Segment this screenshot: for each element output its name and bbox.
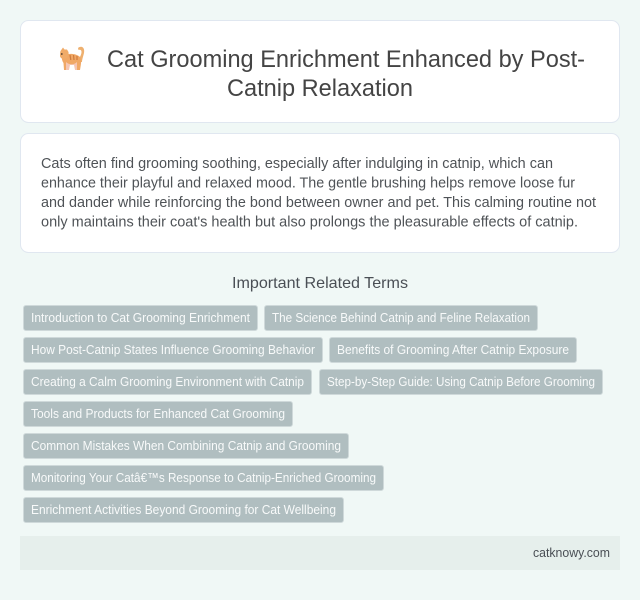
- tag list: [24, 306, 602, 522]
- tag: [24, 402, 292, 426]
- heading: related terms: Important Related Terms: [232, 275, 408, 292]
- tag: Common Mistakes When Combining Catnip and Grooming: [31, 438, 341, 453]
- tag: Introduction to Cat Grooming Enrichment: [31, 310, 250, 325]
- tag: Creating a Calm Grooming Environment with Catnip: [31, 374, 304, 389]
- text block: description: and dander while reinforcing the bond between owner and pet. This calming routine not: [41, 194, 597, 211]
- title: [107, 46, 585, 102]
- tag: Enrichment Activities Beyond Grooming for Cat Wellbeing: [31, 502, 336, 517]
- tag: [24, 338, 322, 362]
- text block: description: Cats often find grooming soothing, especially after indulging in catnip, which can: [41, 155, 553, 172]
- tag: [320, 370, 602, 394]
- title: Catnip Relaxation: [227, 75, 413, 102]
- tag: Benefits of Grooming After Catnip Exposure: [337, 342, 569, 357]
- tag: Step-by-Step Guide: Using Catnip Before Grooming: [327, 374, 595, 389]
- tag: [330, 338, 576, 362]
- tag: [24, 434, 348, 458]
- footer: [20, 536, 620, 570]
- tag: [24, 306, 258, 330]
- tag: [24, 466, 384, 490]
- tag: The Science Behind Catnip and Feline Relaxation: [272, 310, 530, 325]
- text block: description: only maintains their coat's health but also prolongs the pleasurable effects of catnip.: [41, 214, 578, 230]
- tag: [24, 370, 312, 394]
- panel: description: [20, 134, 620, 252]
- text block: description: [41, 155, 597, 230]
- tag: Monitoring Your Catâ€™s Response to Catnip-Enriched Grooming: [31, 470, 376, 485]
- tag: How Post-Catnip States Influence Grooming Behavior: [31, 342, 316, 357]
- tag: Tools and Products for Enhanced Cat Grooming: [31, 406, 285, 421]
- text block: description: enhance their playful and relaxed mood. The gentle brushing helps remove loose fur: [41, 174, 575, 192]
- tag: [264, 306, 538, 330]
- title: Cat Grooming Enrichment Enhanced by Post-: [107, 46, 585, 73]
- footer: catknowy.com: [533, 545, 610, 560]
- icon: cat: [60, 47, 84, 70]
- panel: title card: [20, 20, 620, 122]
- tag: [24, 498, 344, 522]
